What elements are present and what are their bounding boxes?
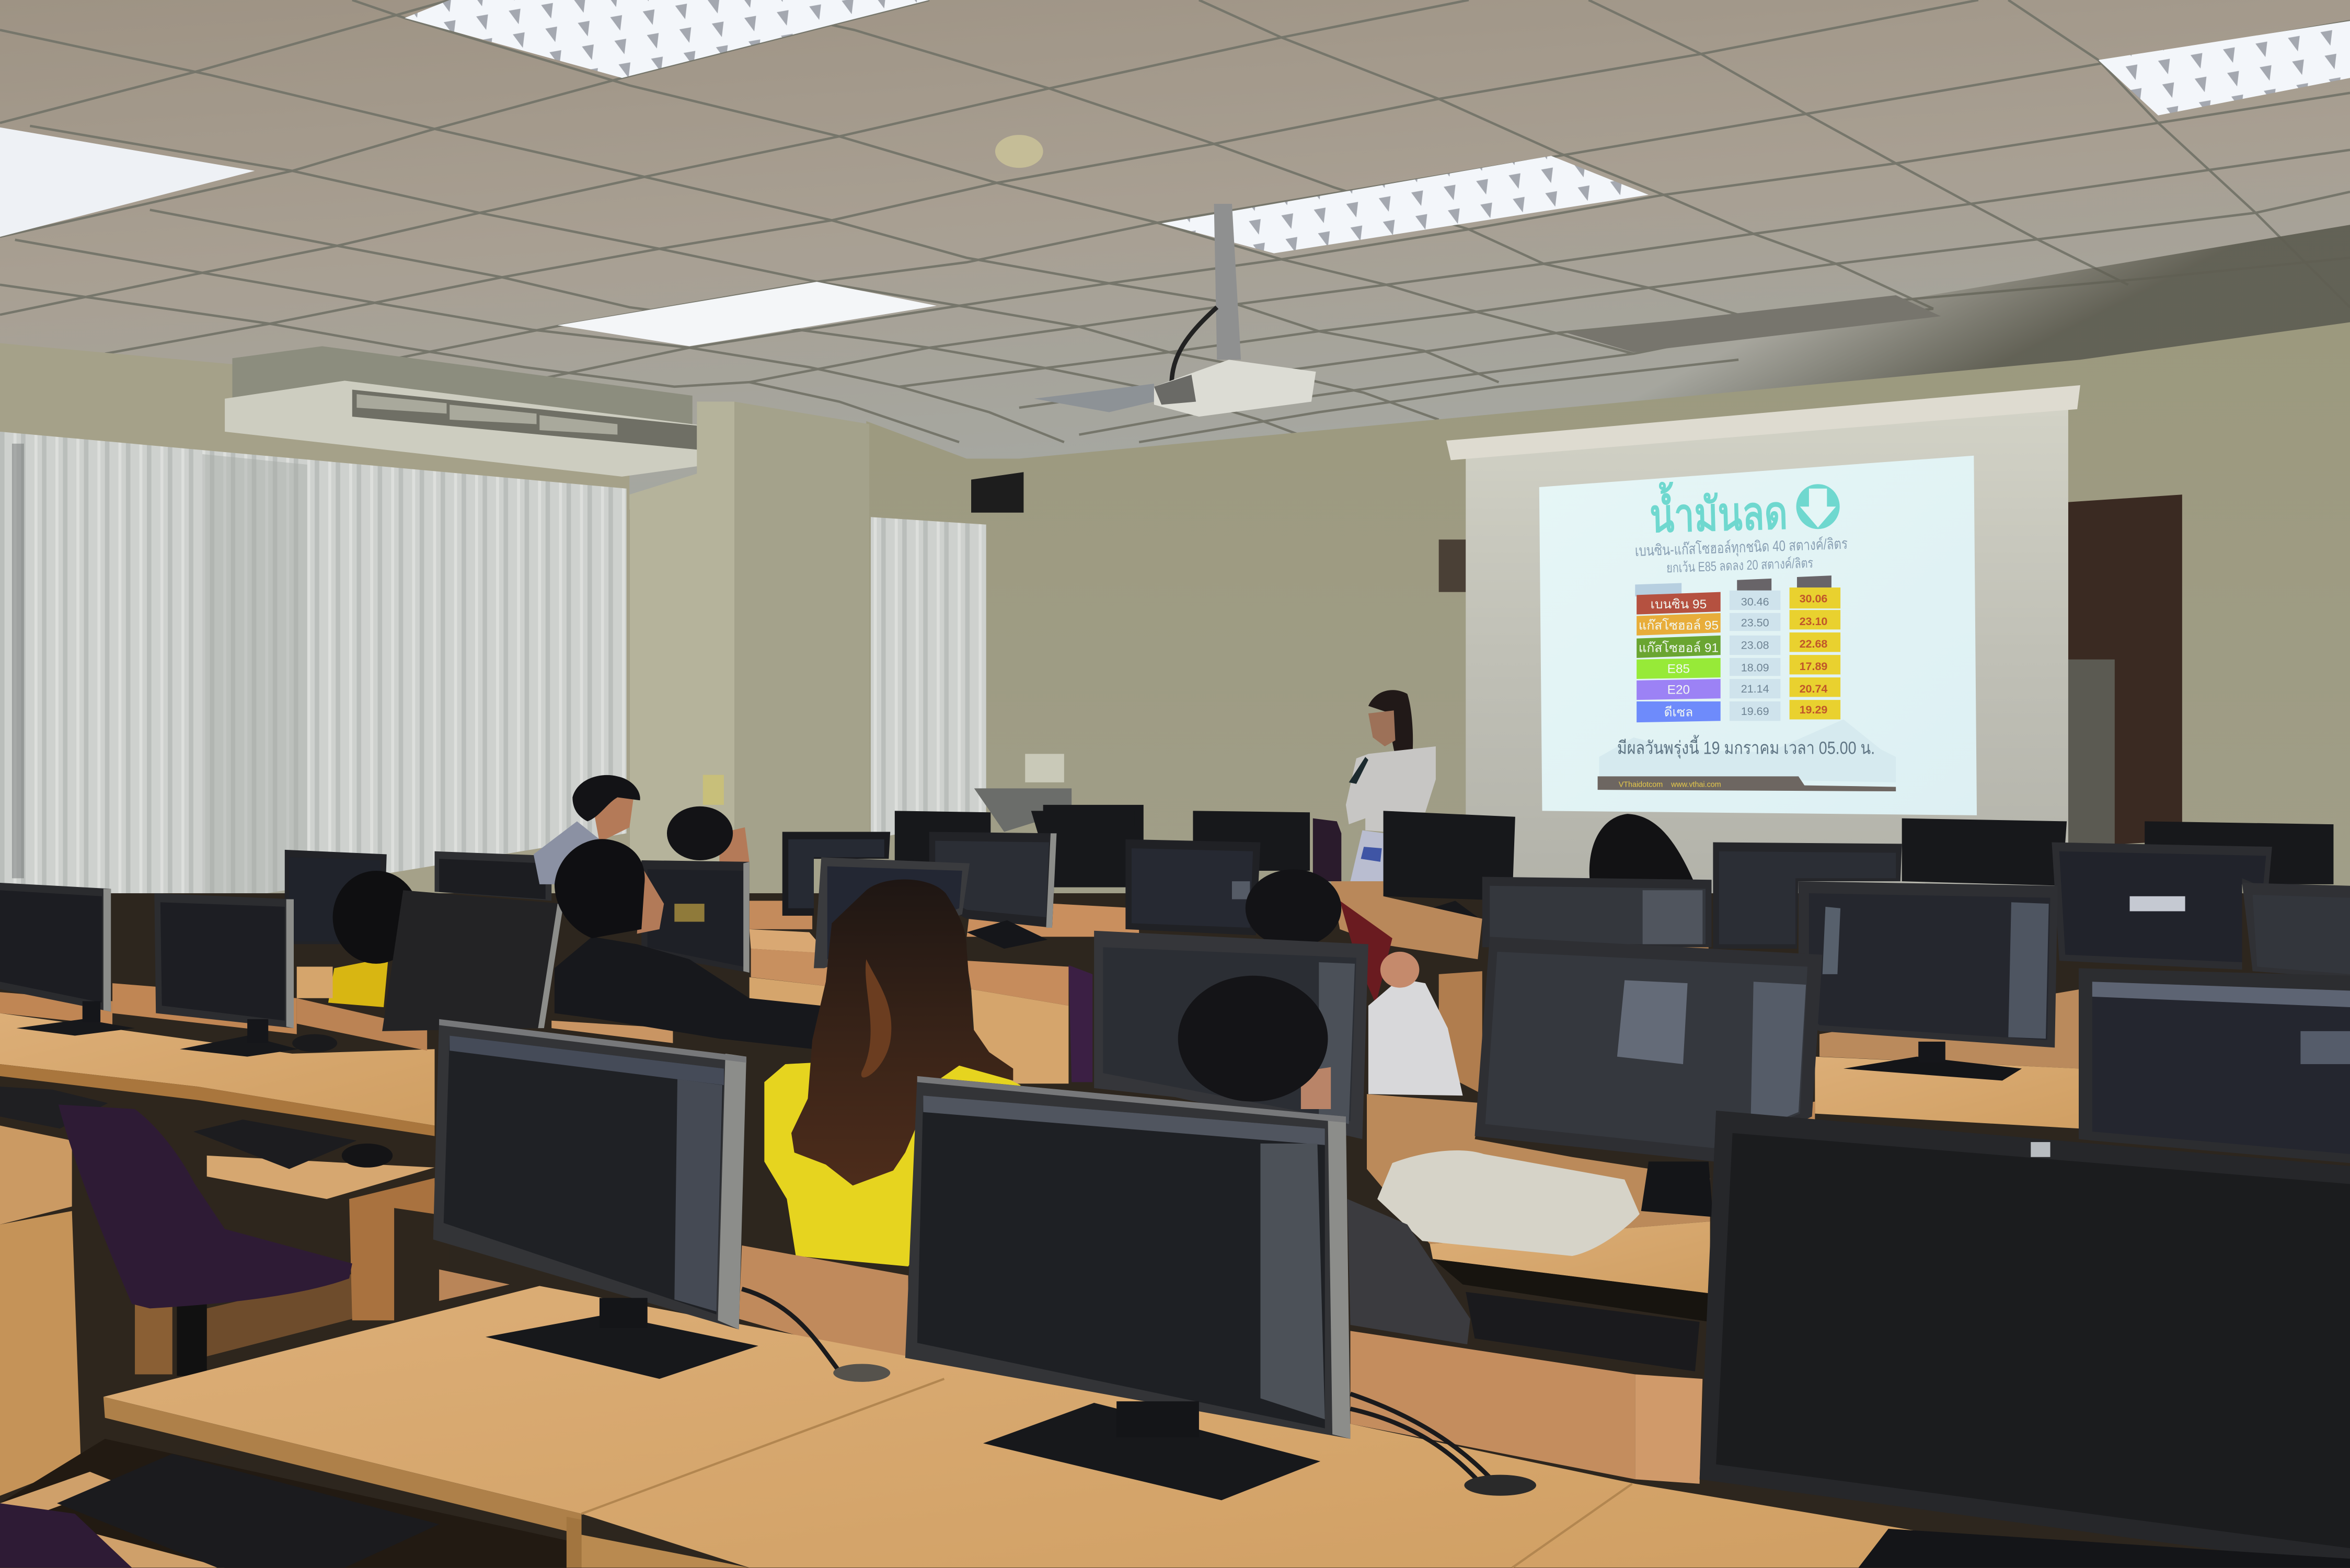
monitor centre: [1094, 931, 1368, 1139]
keyboard left row: [193, 1120, 356, 1169]
far right monitor: [2079, 968, 2350, 1163]
mid desk centre right: [1367, 1094, 1710, 1322]
left desk row: [0, 967, 673, 1320]
centre front monitor: [905, 1076, 1350, 1500]
fuel price table: ดีเซล: [1664, 706, 1693, 720]
floor and under-desk shadow: [0, 893, 2350, 1567]
yellow shirt: [764, 1055, 1021, 1266]
air conditioner: [225, 346, 709, 477]
effective date note: มีผลวันพรุ่งนี้ 19 มกราคม เวลา 05.00 น.: [1617, 734, 1875, 758]
man in black shirt: [555, 839, 821, 1049]
fuel price table: เบนซิน 95: [1651, 597, 1707, 612]
front desk: [103, 1286, 1994, 1567]
white tote bag: [1377, 1150, 1640, 1256]
fuel price table: 17.89: [1800, 660, 1827, 673]
fuel price table: 21.14: [1741, 683, 1769, 695]
footer band: www.vthai.com: [1671, 780, 1721, 789]
front partitions: [439, 1246, 1702, 1484]
blue cushion behind desk: [112, 950, 154, 989]
back row grey box: [974, 788, 1072, 832]
monitor behind man: [641, 860, 750, 973]
monitor row 3 b: [929, 832, 1056, 949]
seated person at screen: [1589, 814, 1695, 884]
person in yellow left: [328, 871, 420, 1007]
monitor with grey document: [1474, 937, 1823, 1217]
monitor row 3 e: [2052, 843, 2272, 970]
slide title: น้ำมันลด: [1649, 478, 1788, 542]
grey jacket: [1347, 1199, 1470, 1344]
fuel price table: 23.50: [1741, 617, 1769, 629]
left front monitor: [433, 1019, 758, 1379]
desk cable: [742, 1289, 839, 1371]
left side floor and shadows: [0, 1049, 450, 1499]
desk grommet: [833, 1364, 890, 1382]
fuel price table: E85: [1667, 662, 1690, 676]
ceiling lights: [0, 0, 2350, 412]
back blinds: [871, 517, 986, 839]
cables to grommet: [1350, 1394, 1496, 1487]
fuel price table: 20.74: [1800, 683, 1827, 695]
fuel price table: 23.10: [1800, 615, 1827, 628]
fuel price table: 19.69: [1741, 705, 1769, 718]
fuel price table: 30.46: [1741, 595, 1769, 608]
back row chair: [1313, 818, 1341, 881]
monitor far left: [0, 883, 135, 1035]
back row monitors: [895, 805, 2333, 923]
wall panel: [1439, 539, 1466, 592]
monitor seen from angle: [382, 890, 563, 1031]
back wall: [866, 322, 2350, 900]
back row partitions: [750, 900, 1709, 1007]
fuel price table: 30.06: [1800, 593, 1827, 605]
person in white shirt: [1246, 869, 1463, 1096]
fuel price table: แก๊สโซฮอล์ 95: [1639, 618, 1719, 632]
keyboard far left: [0, 1087, 108, 1128]
monitor row 3 a: [782, 832, 890, 916]
slide subtitle: [1634, 535, 1848, 575]
woman in yellow: [764, 879, 1021, 1266]
column: [629, 401, 869, 900]
footer band: [1598, 776, 1896, 791]
man standing back left: [534, 775, 640, 884]
fuel price table: 18.09: [1741, 662, 1769, 674]
mid wooden desks: [966, 881, 2080, 1154]
monitor row 3 c: [1125, 839, 1260, 935]
mouse: [342, 1144, 393, 1168]
slide subtitle: ยกเว้น E85 ลดลง 20 สตางค์/ลิตร: [1666, 556, 1814, 575]
long hair: [791, 879, 1013, 1185]
fuel price table: E20: [1667, 683, 1690, 697]
monitor left back b: [435, 851, 551, 901]
window blinds: [0, 432, 627, 919]
footer band: VThaidotcom: [1619, 780, 1663, 789]
projector mount and projector: [1154, 204, 1316, 417]
left wall: [0, 343, 629, 989]
fuel price table: [1635, 575, 1840, 722]
second row monitors: [285, 832, 2350, 978]
grommet right: [1464, 1475, 1536, 1496]
man with glasses: [667, 806, 750, 869]
projected slide: [1539, 456, 1977, 815]
presenter: [1346, 690, 1436, 881]
down arrow icon: [1796, 484, 1840, 529]
monitor row 3 d: [1713, 843, 1902, 949]
monitor right mid: [1799, 881, 2058, 1080]
fuel price table: 23.08: [1741, 639, 1769, 652]
person with ponytail: [1178, 976, 1331, 1109]
monitor left back a: [285, 850, 387, 944]
column sign: [703, 775, 724, 805]
monitor row 3 g: [1482, 877, 1712, 947]
smoke detector: [995, 135, 1043, 168]
monitor left second: [154, 893, 337, 1057]
wall speaker: [971, 472, 1023, 513]
wall sign: [1025, 754, 1064, 782]
monitor row 3 f: [2242, 883, 2350, 978]
front purple chair: [0, 1503, 132, 1567]
left cabinet: [0, 1126, 81, 1496]
purple chair: [59, 1104, 352, 1376]
dark wood panel: [2065, 494, 2182, 847]
keyboard right: [1466, 1292, 1700, 1371]
monitor behind woman: [814, 857, 970, 968]
city silhouette: [1599, 719, 1896, 782]
fuel price table: 19.29: [1800, 704, 1827, 716]
purple chair back row: [1068, 965, 1092, 1082]
large foreground monitor: [1700, 1111, 2350, 1567]
front keyboard tray: [0, 1439, 582, 1567]
front keyboard: [57, 1454, 439, 1567]
fuel price table: แก๊สโซฮอล์ 91: [1639, 640, 1719, 655]
fuel price table: 22.68: [1800, 638, 1827, 650]
ceiling: [0, 0, 2350, 510]
projection screen: [1446, 385, 2080, 900]
slide subtitle: เบนซิน-แก๊สโซฮอล์ทุกชนิด 40 สตางค์/ลิตร: [1634, 535, 1848, 560]
